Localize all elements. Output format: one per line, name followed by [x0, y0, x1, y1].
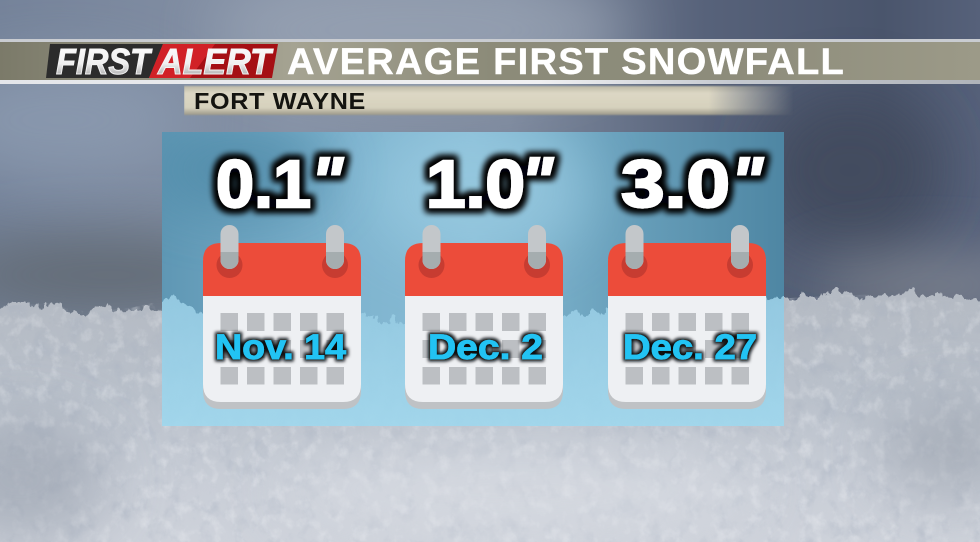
logo: First Alert — [46, 41, 278, 82]
amount: 3.0 — [621, 147, 730, 222]
amount: 0.1 — [216, 147, 311, 222]
date: Dec. 2 — [428, 328, 543, 367]
icon: calendar — [203, 225, 361, 409]
amount: 1.0 — [426, 147, 525, 222]
column: 0.1 inch, Nov. 14 — [203, 144, 361, 409]
subheader: location bar — [184, 86, 794, 115]
subheader: location bar: FORT WAYNE — [194, 88, 366, 114]
amount: " — [521, 144, 554, 219]
icon: calendar — [405, 225, 563, 409]
panel: snowfall dates — [162, 132, 784, 426]
header: title bar — [0, 39, 980, 84]
date: Dec. 27 — [623, 328, 757, 367]
logo: First Alert: ALERT — [157, 41, 274, 82]
panel background — [162, 132, 784, 426]
title text: AVERAGE FIRST SNOWFALL — [287, 41, 845, 82]
date: Nov. 14 — [215, 328, 347, 367]
icon: calendar — [608, 225, 766, 409]
amount: " — [311, 144, 344, 219]
logo: First Alert: FIRST — [56, 41, 153, 82]
column: 1.0 inch, Dec. 2 — [405, 144, 563, 409]
background: snow field — [0, 285, 980, 542]
amount — [216, 144, 344, 222]
amount — [621, 144, 764, 222]
column: 3.0 inch, Dec. 27 — [608, 144, 766, 409]
amount — [426, 144, 554, 222]
amount: " — [731, 144, 764, 219]
